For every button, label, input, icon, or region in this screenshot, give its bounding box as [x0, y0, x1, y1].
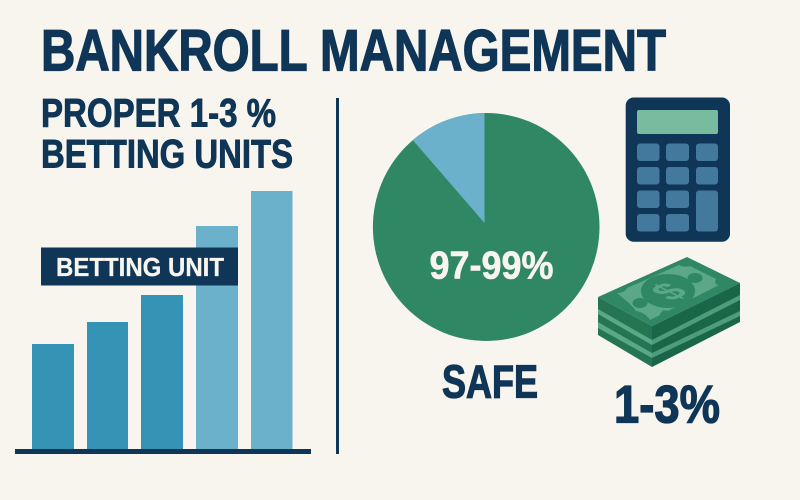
dollar sign: $ — [640, 277, 697, 306]
cash percentage label: 1-3% — [614, 376, 720, 434]
bar chart: betting units — [15, 191, 311, 454]
pie value label: 97-99% — [430, 244, 554, 288]
pie chart — [373, 113, 600, 341]
subtitle: BETTING UNITS — [41, 132, 293, 176]
icon: stack of cash — [598, 257, 740, 367]
safe label: SAFE — [442, 356, 538, 408]
label: betting unit: BETTING UNIT — [56, 252, 224, 282]
subtitle — [41, 92, 293, 176]
title: BANKROLL MANAGEMENT — [41, 18, 666, 84]
subtitle: PROPER 1-3 % — [41, 92, 276, 136]
divider — [336, 98, 339, 454]
icon: calculator — [626, 98, 730, 242]
